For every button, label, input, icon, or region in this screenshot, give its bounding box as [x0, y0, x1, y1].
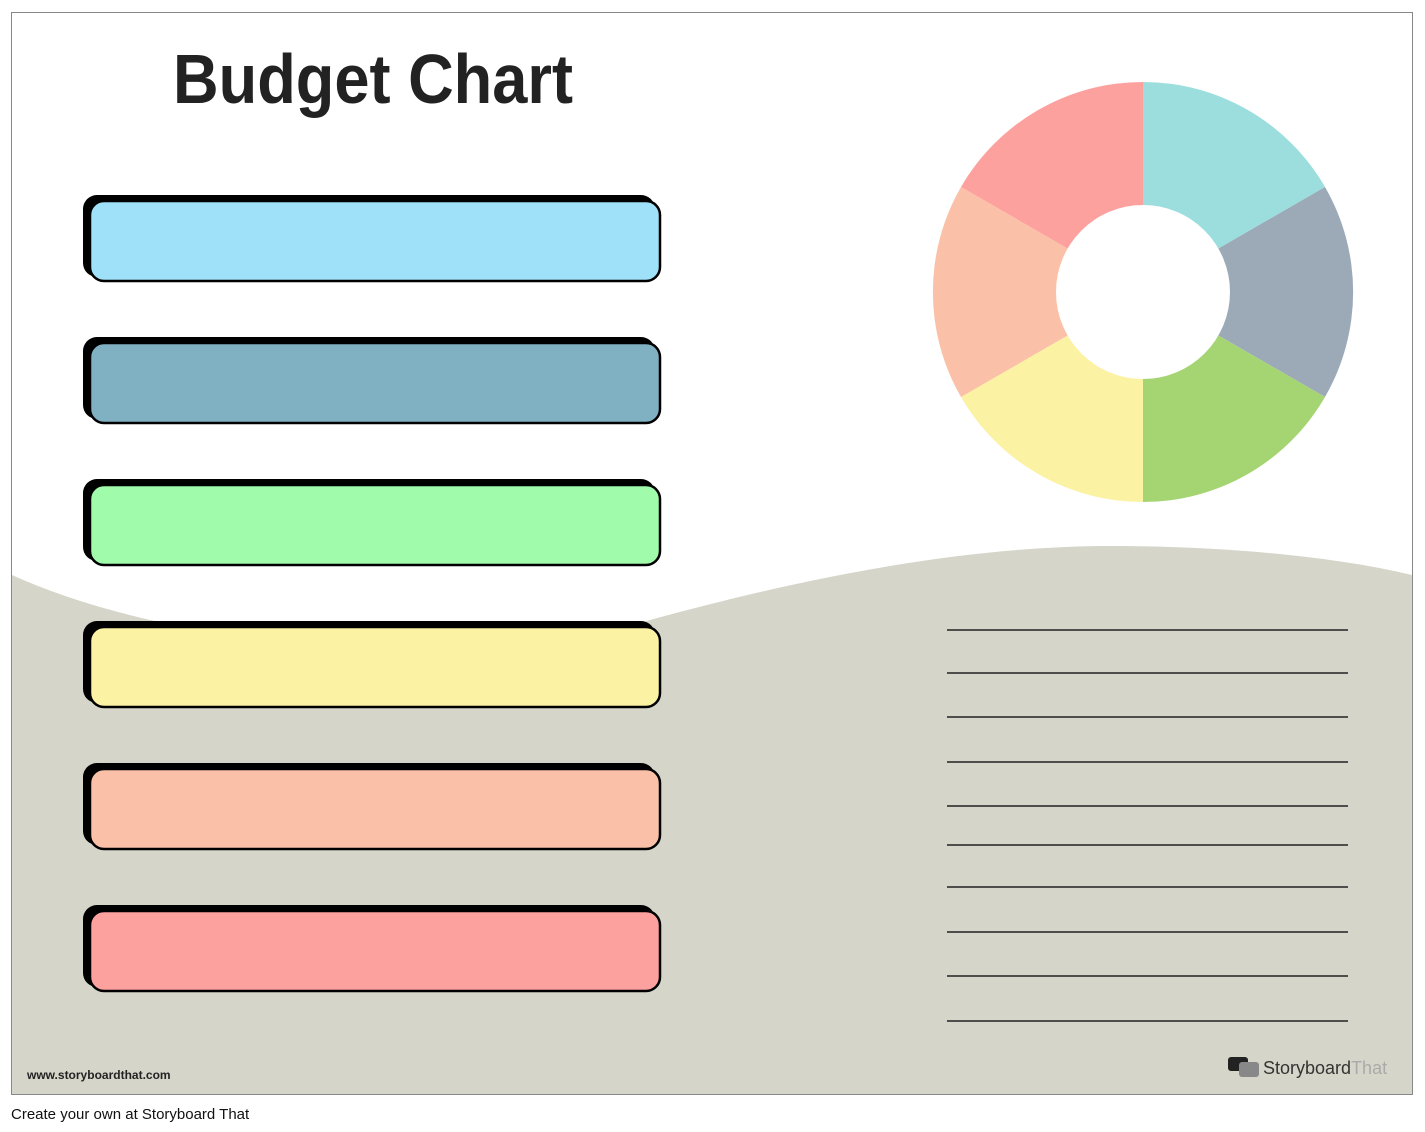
- bar 3: green: [83, 479, 660, 565]
- writing lines: [947, 630, 1348, 1021]
- bar 1: blue: [83, 195, 660, 281]
- website text: www.storyboardthat.com: [26, 1068, 171, 1082]
- bar 6: pink: [83, 905, 660, 991]
- bar 4: yellow: [83, 621, 660, 707]
- bar 5: peach: [83, 763, 660, 849]
- logo: StoryboardThat: [1263, 1058, 1387, 1078]
- bar 2: steel blue: [83, 337, 660, 423]
- footer caption: Create your own at Storyboard That: [11, 1106, 250, 1123]
- donut chart: [933, 82, 1353, 502]
- title: Budget Chart: [173, 40, 573, 118]
